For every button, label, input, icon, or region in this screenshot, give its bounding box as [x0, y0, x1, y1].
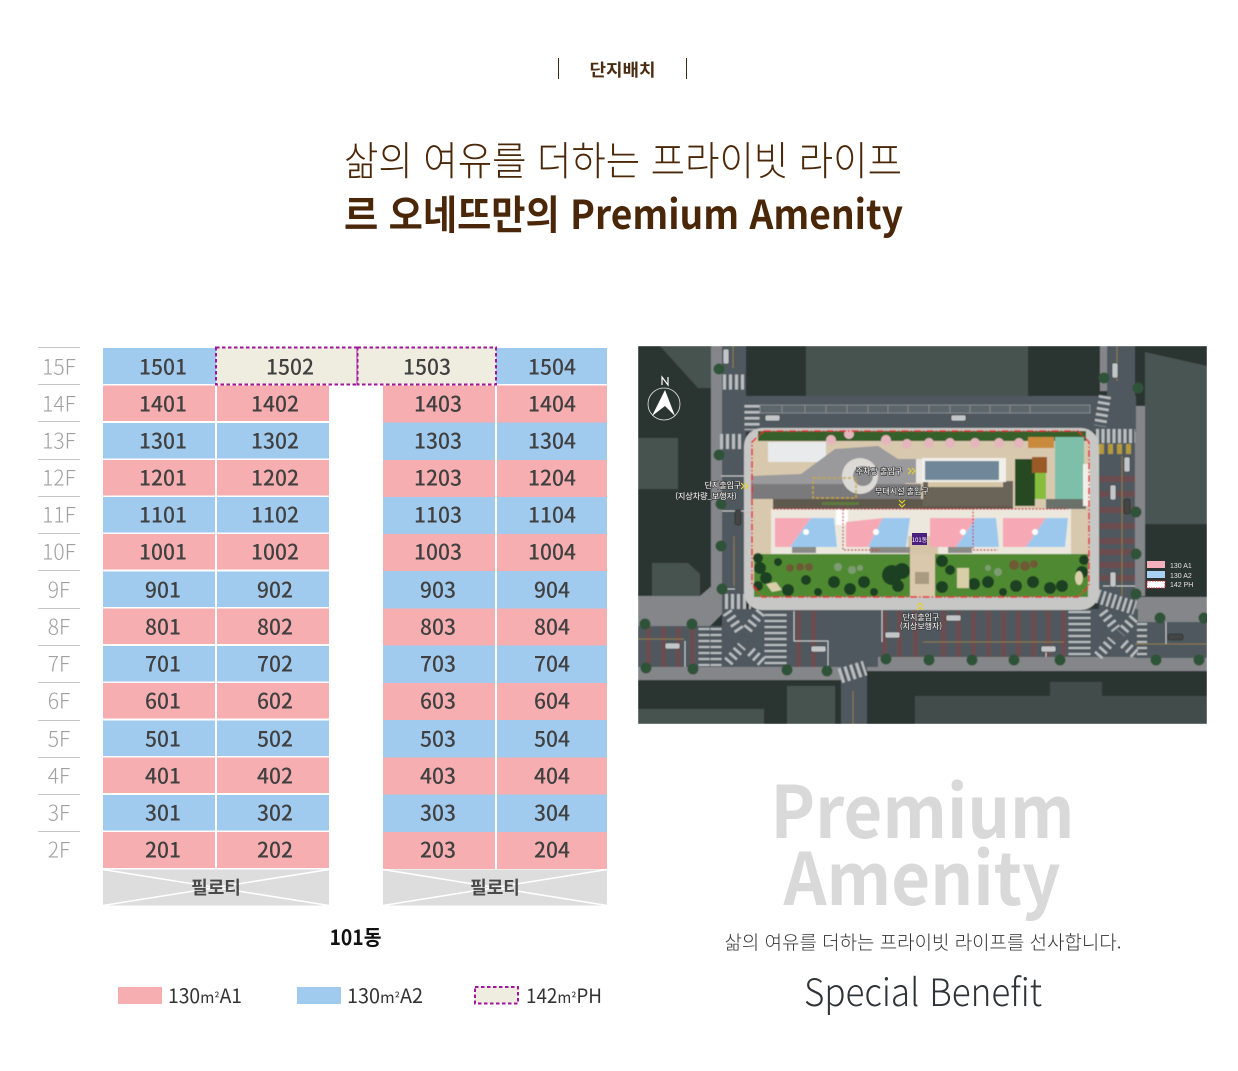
map label: parking entrance: 주차장 출입구 — [856, 466, 902, 477]
floor labels: 8F — [48, 612, 70, 642]
row 14F — [103, 386, 607, 422]
bottom garden — [753, 553, 1089, 597]
legend: A1 — [118, 980, 242, 1009]
floor labels: 10F — [42, 536, 76, 566]
title: 르 오네뜨만의 Premium Amenity — [344, 183, 903, 241]
row 14F: 1404 — [528, 388, 576, 418]
site boundary — [752, 431, 1089, 597]
row 4F: 404 — [534, 760, 570, 790]
row 15F: 1502 — [266, 352, 314, 382]
row 12F: 1203 — [414, 462, 462, 492]
row 10F: 1001 — [139, 536, 187, 566]
title — [344, 129, 903, 241]
section tag — [558, 56, 687, 81]
row 5F: 504 — [534, 724, 570, 754]
row 7F: 703 — [420, 648, 456, 678]
road stripes — [646, 476, 1135, 667]
piloti right: 필로티 — [470, 874, 520, 900]
section tag: 단지배치 — [590, 56, 656, 81]
row 13F: 1303 — [414, 426, 462, 456]
map legend — [1147, 561, 1193, 589]
row 4F: 401 — [145, 760, 181, 790]
row 6F: 603 — [420, 686, 456, 716]
floor labels: 15F — [42, 352, 76, 382]
map label: pedestrian entrance: (지상보행자) — [900, 621, 942, 632]
row 4F: 403 — [420, 760, 456, 790]
floor labels: 2F — [48, 834, 70, 864]
units — [775, 518, 811, 547]
row 15F: 1501 — [139, 352, 187, 382]
row 10F: 1002 — [251, 536, 299, 566]
row 12F — [103, 460, 607, 497]
legend: PH: 142m²PH — [526, 980, 602, 1009]
row 11F: 1104 — [528, 500, 576, 530]
big caption: Premium Amenity: Premium — [770, 754, 1074, 859]
floor labels: 13F — [42, 426, 76, 456]
row 2F: 204 — [534, 834, 570, 864]
map label: complex entrance — [675, 480, 741, 502]
row 7F — [103, 646, 607, 683]
legend: A1: 130m²A1 — [168, 980, 242, 1009]
glass roof — [922, 458, 1006, 482]
floor labels: 11F — [42, 500, 76, 530]
big caption: Premium Amenity — [770, 754, 1074, 926]
row 3F: 302 — [257, 798, 293, 828]
building name: 101동 — [330, 922, 382, 952]
row 15F: 1503 — [403, 352, 451, 382]
row 14F: 1401 — [139, 388, 187, 418]
row 4F: 402 — [257, 760, 293, 790]
row 5F: 503 — [420, 724, 456, 754]
row 6F: 604 — [534, 686, 570, 716]
row 9F: 903 — [420, 574, 456, 604]
row 5F: 502 — [257, 724, 293, 754]
yellow chevrons — [741, 468, 923, 610]
row 10F — [103, 534, 607, 571]
floor labels: 6F — [48, 686, 70, 716]
row 9F: 904 — [534, 574, 570, 604]
floor labels: 14F — [42, 388, 76, 418]
row 3F: 304 — [534, 798, 570, 828]
row 15F — [103, 348, 607, 384]
row 3F: 301 — [145, 798, 181, 828]
floor labels: 9F — [48, 574, 70, 604]
cherry trees — [826, 429, 1024, 449]
legend: A2 — [297, 980, 423, 1009]
driveway — [751, 446, 916, 499]
row 4F — [103, 758, 607, 794]
row 6F — [103, 683, 607, 720]
map label: complex entrance: 단지출입구 — [705, 480, 741, 491]
row 9F: 902 — [257, 574, 293, 604]
road centre lines — [638, 346, 1207, 724]
row 3F — [103, 794, 607, 832]
row 9F: 901 — [145, 574, 181, 604]
site ground — [752, 431, 1089, 597]
street trees — [640, 364, 1210, 676]
right garden — [1015, 437, 1090, 509]
row 10F: 1004 — [528, 536, 576, 566]
rooftop block — [768, 442, 826, 462]
caption text: 삶의 여유를 더하는 프라이빗 라이프를 선사합니다. — [724, 928, 1122, 955]
row 2F: 203 — [420, 834, 456, 864]
row 5F: 501 — [145, 724, 181, 754]
row 7F: 704 — [534, 648, 570, 678]
building footprint — [771, 509, 1071, 554]
row 3F: 303 — [420, 798, 456, 828]
piloti right — [383, 870, 607, 906]
map legend: 130 A1 — [1170, 563, 1192, 570]
row 9F — [103, 571, 607, 608]
floor labels: 7F — [48, 648, 70, 678]
legend — [118, 980, 602, 1009]
floor labels: 4F — [48, 760, 70, 790]
row 8F: 801 — [145, 612, 181, 642]
row 11F — [103, 497, 607, 534]
row 13F: 1304 — [528, 426, 576, 456]
map label: facility entrance: 부대시설 출입구 — [875, 486, 929, 497]
row 8F: 803 — [420, 612, 456, 642]
legend: A2: 130m²A2 — [347, 980, 423, 1009]
floor labels — [38, 347, 80, 864]
row 8F: 804 — [534, 612, 570, 642]
basement band — [773, 499, 1013, 509]
special benefit: Special Benefit — [804, 962, 1042, 1017]
stop lines — [685, 476, 1166, 667]
row 13F: 1302 — [251, 426, 299, 456]
top parking strip — [760, 405, 1090, 413]
floor labels: 3F — [48, 798, 70, 828]
top hedge — [758, 431, 1086, 441]
icon: north compass — [648, 377, 680, 420]
row 8F: 802 — [257, 612, 293, 642]
building unit chart: 101동 — [38, 347, 607, 952]
row 14F: 1402 — [251, 388, 299, 418]
row 11F: 1102 — [251, 500, 299, 530]
row 11F: 1101 — [139, 500, 187, 530]
cars — [665, 349, 1183, 652]
title: 삶의 여유를 더하는 프라이빗 라이프 — [344, 129, 902, 187]
row 12F: 1201 — [139, 462, 187, 492]
row 7F: 701 — [145, 648, 181, 678]
map legend: 142 PH — [1170, 582, 1193, 589]
row 12F: 1204 — [528, 462, 576, 492]
row 5F — [103, 720, 607, 758]
map label: pedestrian entrance: 단지출입구 — [903, 612, 939, 623]
map label: pedestrian entrance — [900, 612, 942, 632]
surrounding buildings — [638, 346, 1207, 724]
roundabout — [842, 458, 878, 494]
row 13F — [103, 422, 607, 460]
row 7F: 702 — [257, 648, 293, 678]
crosswalks — [704, 382, 1142, 676]
building tag 101동: 101동 — [912, 535, 928, 544]
piloti left — [103, 870, 329, 906]
map label: complex entrance: (지상차량_보행자) — [675, 491, 737, 502]
site sidewalk — [744, 428, 1099, 610]
site plan map — [638, 346, 1207, 724]
big caption: Premium Amenity: Amenity — [783, 821, 1060, 926]
floor labels: 5F — [48, 724, 70, 754]
row 8F — [103, 608, 607, 646]
row 11F: 1103 — [414, 500, 462, 530]
roads — [638, 346, 1207, 724]
legend: PH — [475, 980, 602, 1009]
row 10F: 1003 — [414, 536, 462, 566]
floor labels: 12F — [42, 462, 76, 492]
row 6F: 601 — [145, 686, 181, 716]
piloti left: 필로티 — [191, 874, 241, 900]
row 15F: 1504 — [528, 352, 576, 382]
row 6F: 602 — [257, 686, 293, 716]
row 14F: 1403 — [414, 388, 462, 418]
row 13F: 1301 — [139, 426, 187, 456]
sidewalks — [638, 346, 1207, 680]
row 2F: 201 — [145, 834, 181, 864]
row 2F — [103, 832, 607, 869]
row 12F: 1202 — [251, 462, 299, 492]
map legend: 130 A2 — [1170, 573, 1192, 580]
row 2F: 202 — [257, 834, 293, 864]
